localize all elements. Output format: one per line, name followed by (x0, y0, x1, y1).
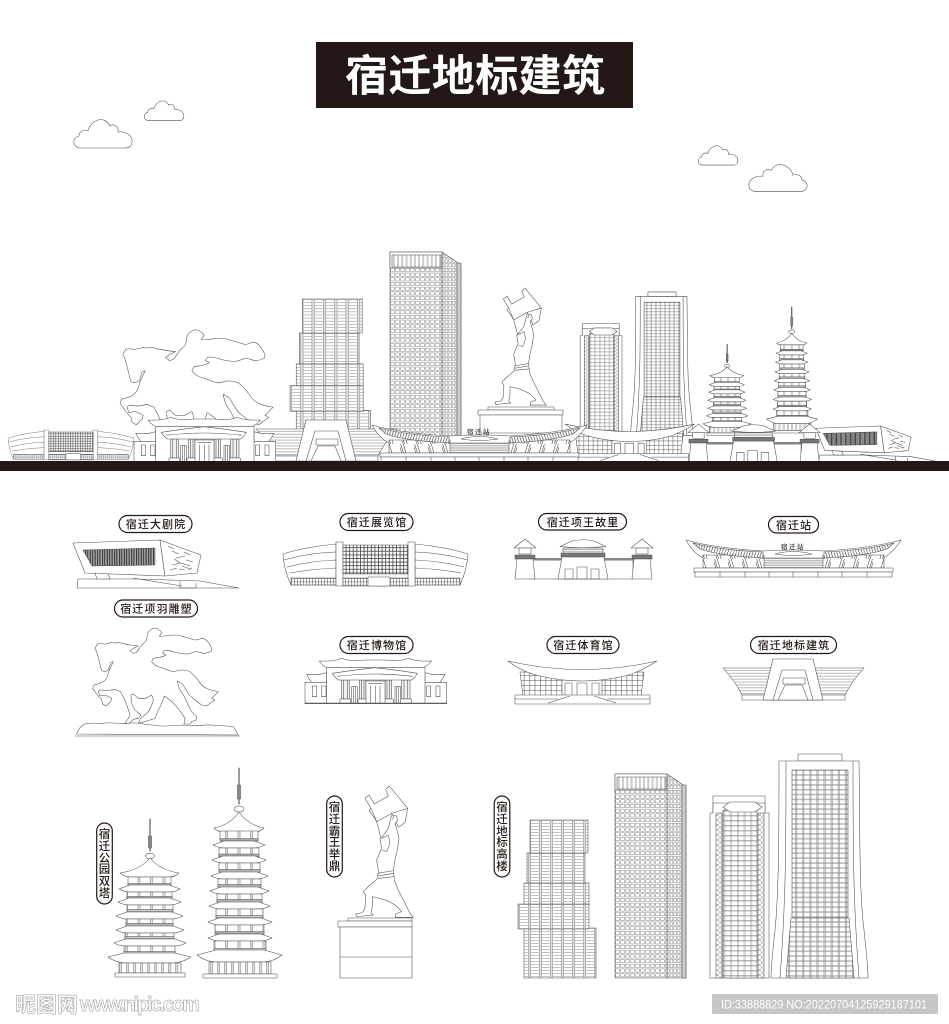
label: exhibition hall (340, 514, 413, 530)
skyline: Xiang Wang residence (688, 424, 820, 462)
cloud: upper left large (74, 120, 132, 148)
label: park twin pagodas: 迁 (99, 840, 111, 853)
skyline: exhibition hall (8, 430, 134, 460)
label: Overlord lifting the ding: 霸 (329, 825, 340, 838)
skyline: tower D (631, 292, 693, 435)
landmark: railway station (686, 516, 901, 577)
tower: crowned (710, 796, 769, 978)
label: Overlord lifting the ding: 宿 (329, 800, 340, 814)
watermark: nipic logo: www.nipic.com (79, 994, 200, 1016)
label: park twin pagodas: 宿 (99, 827, 110, 841)
label: arch building: 宿迁地标建筑 (758, 638, 830, 652)
label: Overlord lifting the ding: 王 (329, 836, 340, 849)
building: exhibition hall (283, 542, 468, 586)
tower: stacked (518, 820, 596, 978)
building: gymnasium (508, 661, 657, 704)
skyline: gymnasium (565, 424, 695, 461)
skyline: tower C (580, 324, 622, 453)
landmark: museum (305, 636, 447, 704)
label: museum: 宿迁博物馆 (347, 638, 407, 652)
label: high-rise towers: 楼 (496, 859, 508, 873)
skyline: small pagoda (703, 344, 751, 435)
landmark: exhibition hall (283, 514, 468, 586)
pagoda: tall (197, 768, 282, 978)
skyline: railway station (372, 425, 587, 462)
skyline: ground bar (0, 461, 949, 471)
label: high-rise towers: 宿 (496, 800, 508, 814)
building: railway station (686, 540, 901, 577)
landmark: park twin pagodas (97, 768, 282, 978)
label: high-rise towers: 高 (496, 847, 508, 861)
label: railway station (768, 516, 818, 533)
label: exhibition hall: 宿迁展览馆 (347, 515, 407, 529)
label: museum (340, 636, 413, 654)
landmark: gymnasium (508, 636, 657, 704)
skyline: theatre (816, 426, 939, 462)
label: high-rise towers: 迁 (496, 813, 508, 826)
watermark: nipic logo (15, 994, 200, 1017)
tower: flared (771, 754, 868, 978)
pagoda: small (108, 819, 191, 977)
label: Xiang Yu sculpture: 宿迁项羽雕塑 (120, 602, 193, 616)
skyline panel (0, 252, 949, 471)
label: Overlord lifting the ding: 鼎 (329, 860, 340, 873)
title banner (316, 42, 633, 108)
landmark: Xiang Yu sculpture (75, 600, 240, 736)
building: Xiang Wang residence (514, 539, 653, 579)
label: Overlord lifting the ding: 迁 (329, 813, 341, 826)
landmark: high-rise towers (494, 754, 868, 978)
building: arch building (723, 659, 864, 700)
label: park twin pagodas: 塔 (99, 886, 111, 900)
landmark: arch building (723, 636, 864, 700)
skyline: stacked tower (290, 299, 370, 462)
watermark: nipic logo: 昵图网 (15, 994, 78, 1017)
landmark: Xiang Wang residence (514, 514, 653, 579)
label: theatre (119, 516, 192, 532)
skyline: museum (134, 417, 276, 463)
skyline: landmark arch building (256, 420, 397, 461)
sculpture: horse and rider (93, 628, 218, 724)
label: Xiang Wang residence: 宿迁项王故里 (547, 515, 619, 529)
label: Overlord lifting the ding (327, 796, 342, 877)
label: railway station: 宿迁站 (776, 518, 812, 532)
skyline: tall tower (390, 252, 461, 456)
skyline: statue plinth (478, 407, 563, 433)
skyline: tall pagoda (766, 307, 818, 433)
skyline: statue lifting the ding (495, 288, 546, 405)
landmark: Overlord lifting the ding (327, 786, 413, 978)
cloud: right small (698, 146, 738, 165)
skyline: horse statue (120, 330, 273, 447)
label: gymnasium (547, 636, 619, 654)
label: high-rise towers: 地 (496, 824, 508, 838)
tower: tall slab (615, 774, 686, 978)
cloud: upper left small (144, 101, 184, 121)
label: park twin pagodas: 园 (99, 864, 110, 876)
label: park twin pagodas: 双 (99, 875, 111, 888)
watermark: image id: ID:33888829 NO:20220704125929187101 (721, 1000, 927, 1012)
label: gymnasium: 宿迁体育馆 (553, 638, 614, 652)
label: Overlord lifting the ding: 举 (329, 847, 341, 861)
statue: plinth (338, 918, 412, 978)
statue: figure (356, 786, 413, 917)
sculpture: base (75, 723, 240, 736)
label: park twin pagodas (97, 823, 112, 904)
watermark: image id (712, 994, 938, 1014)
building: theatre (73, 540, 239, 588)
label: theatre: 宿迁大剧院 (126, 517, 186, 531)
building: museum (305, 658, 447, 704)
label: high-rise towers (494, 796, 510, 877)
title banner: 宿迁地标建筑 (345, 53, 605, 101)
clouds (74, 101, 807, 191)
label: park twin pagodas: 公 (99, 852, 111, 865)
label: high-rise towers: 标 (496, 836, 508, 849)
cloud: right large (749, 165, 807, 191)
landmark: theatre (73, 516, 239, 588)
label: Xiang Yu sculpture (114, 600, 198, 617)
label: arch building (750, 636, 836, 654)
